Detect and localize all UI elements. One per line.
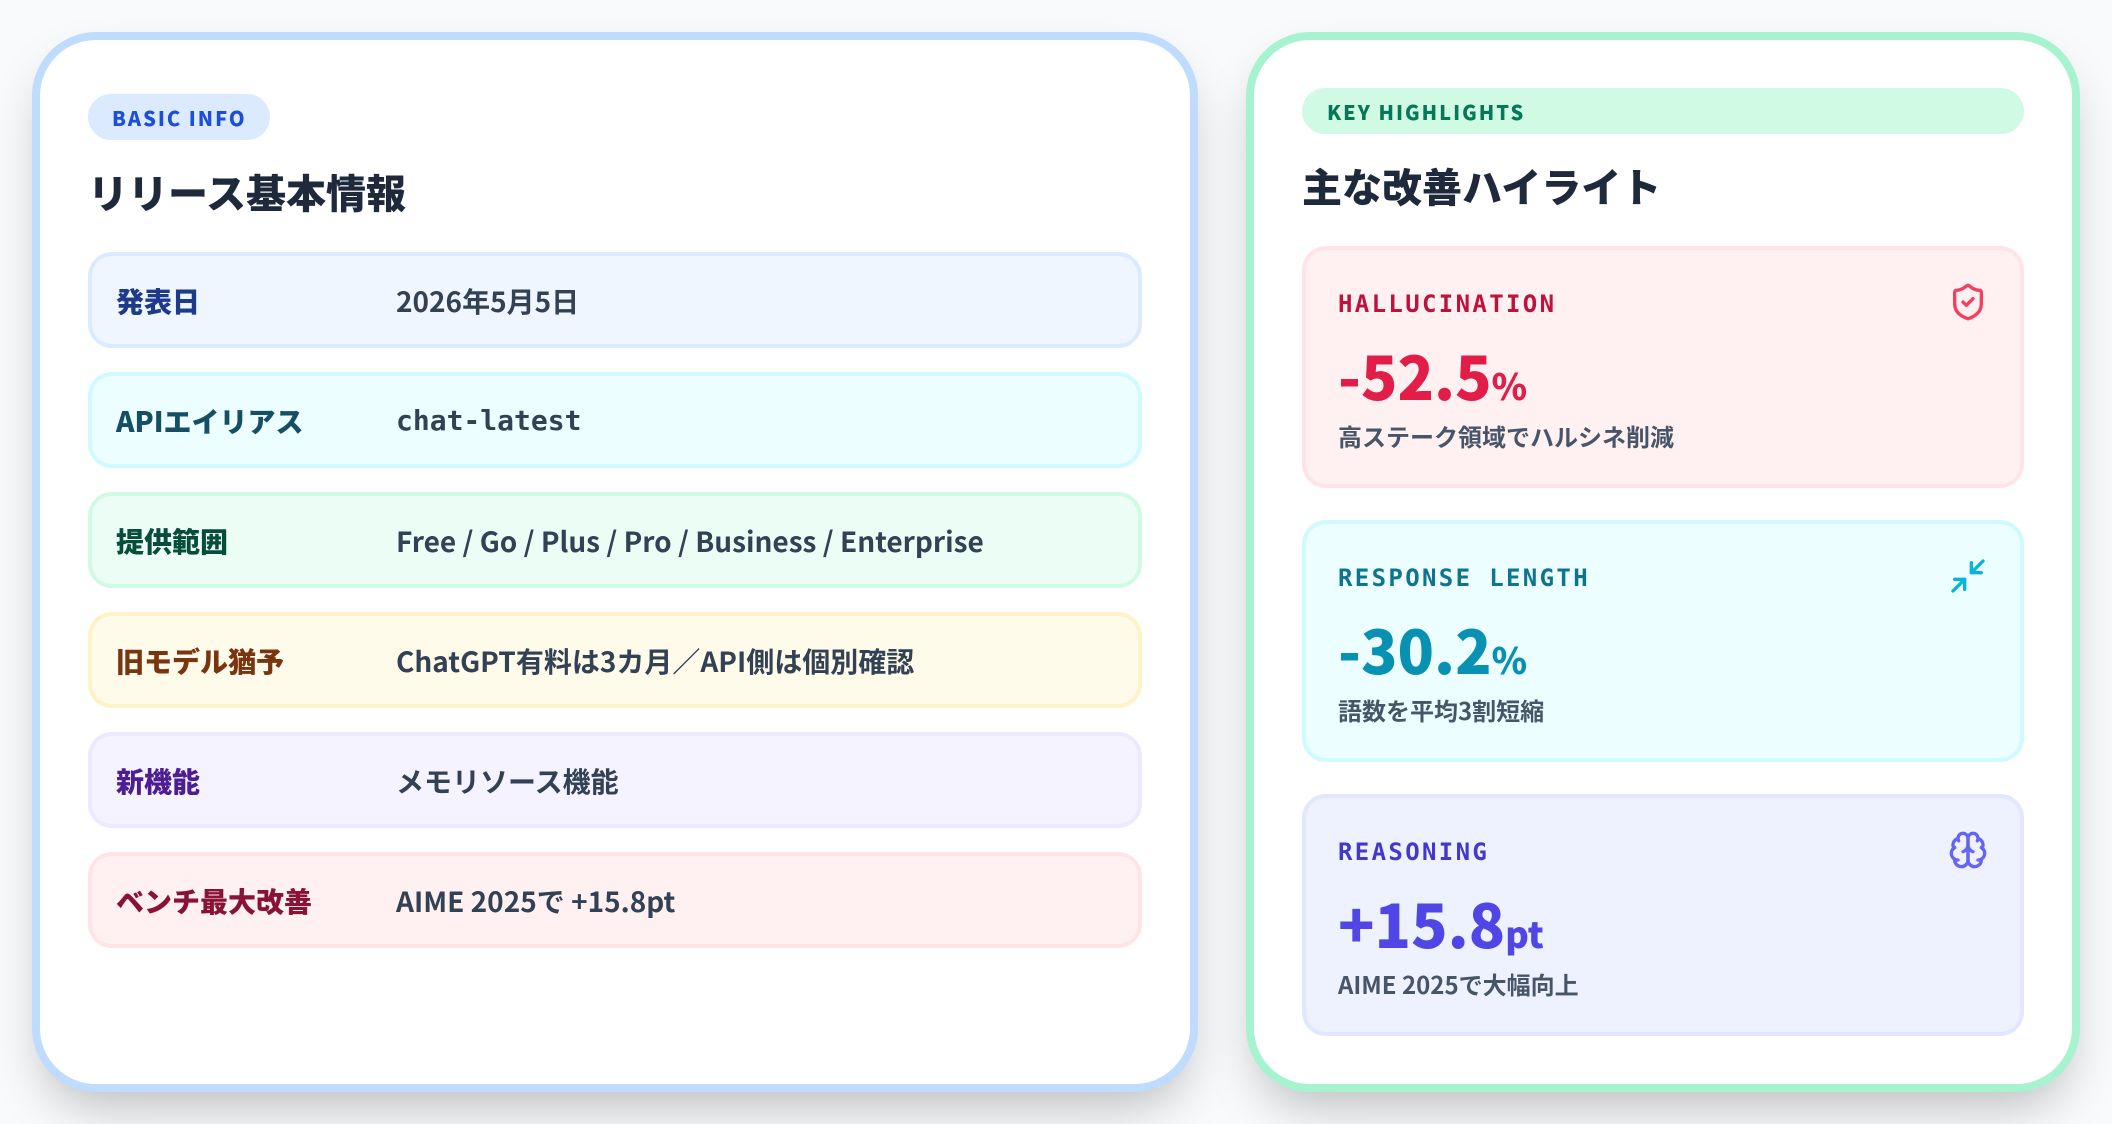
row: announcement date [88, 252, 1142, 348]
stat label: hallucination: HALLUCINATION [1338, 290, 1556, 318]
stat note: hallucination: 高ステーク領域でハルシネ削減 [1338, 418, 1674, 453]
row: API alias [88, 372, 1142, 468]
row: API alias: APIエイリアス [116, 401, 304, 441]
row: new feature [88, 732, 1142, 828]
row: legacy model grace period [88, 612, 1142, 708]
badge: KEY HIGHLIGHTS: KEY HIGHLIGHTS [1327, 97, 1525, 126]
row: legacy model grace period: ChatGPT有料は3カ月／API側は個別確認 [396, 641, 914, 681]
stat value: +15.8pt: +15.8pt [1338, 879, 1544, 966]
icon: brain [1950, 832, 1986, 868]
row: new feature: メモリソース機能 [396, 761, 619, 801]
heading: release basics: リリース基本情報 [88, 162, 406, 220]
stat note: response length: 語数を平均3割短縮 [1338, 692, 1544, 727]
heading: main highlights: 主な改善ハイライト [1302, 156, 1661, 214]
stat label: response length: RESPONSE LENGTH [1338, 564, 1590, 592]
stat card: response length [1302, 520, 2024, 762]
row: announcement date: 2026年5月5日 [396, 281, 579, 321]
row: top benchmark improvement [88, 852, 1142, 948]
row: new feature: 新機能 [116, 761, 200, 801]
row: availability: Free / Go / Plus / Pro / Business / Enterprise [396, 521, 984, 561]
badge: BASIC INFO [88, 94, 270, 140]
row: top benchmark improvement: AIME 2025で +15.8pt [396, 881, 675, 921]
stat value: -52.5%: -52.5% [1338, 331, 1527, 418]
panel: key highlights card [1246, 32, 2080, 1092]
stat card: hallucination [1302, 246, 2024, 488]
badge: BASIC INFO: BASIC INFO [112, 103, 247, 132]
row: availability: 提供範囲 [116, 521, 228, 561]
stat note: reasoning: AIME 2025で大幅向上 [1338, 966, 1579, 1001]
badge: KEY HIGHLIGHTS [1302, 88, 2024, 134]
icon: minimize arrows [1951, 559, 1985, 593]
row: availability [88, 492, 1142, 588]
row: API alias: chat-latest [396, 404, 581, 437]
stat card: reasoning [1302, 794, 2024, 1036]
stat value: -30.2%: -30.2% [1338, 605, 1527, 692]
row: announcement date: 発表日 [116, 281, 200, 321]
row: legacy model grace period: 旧モデル猶予 [116, 641, 284, 681]
row: top benchmark improvement: ベンチ最大改善 [116, 881, 312, 921]
icon: shield check [1953, 284, 1983, 320]
panel: basic info card [32, 32, 1198, 1092]
stat label: reasoning: REASONING [1338, 838, 1489, 866]
